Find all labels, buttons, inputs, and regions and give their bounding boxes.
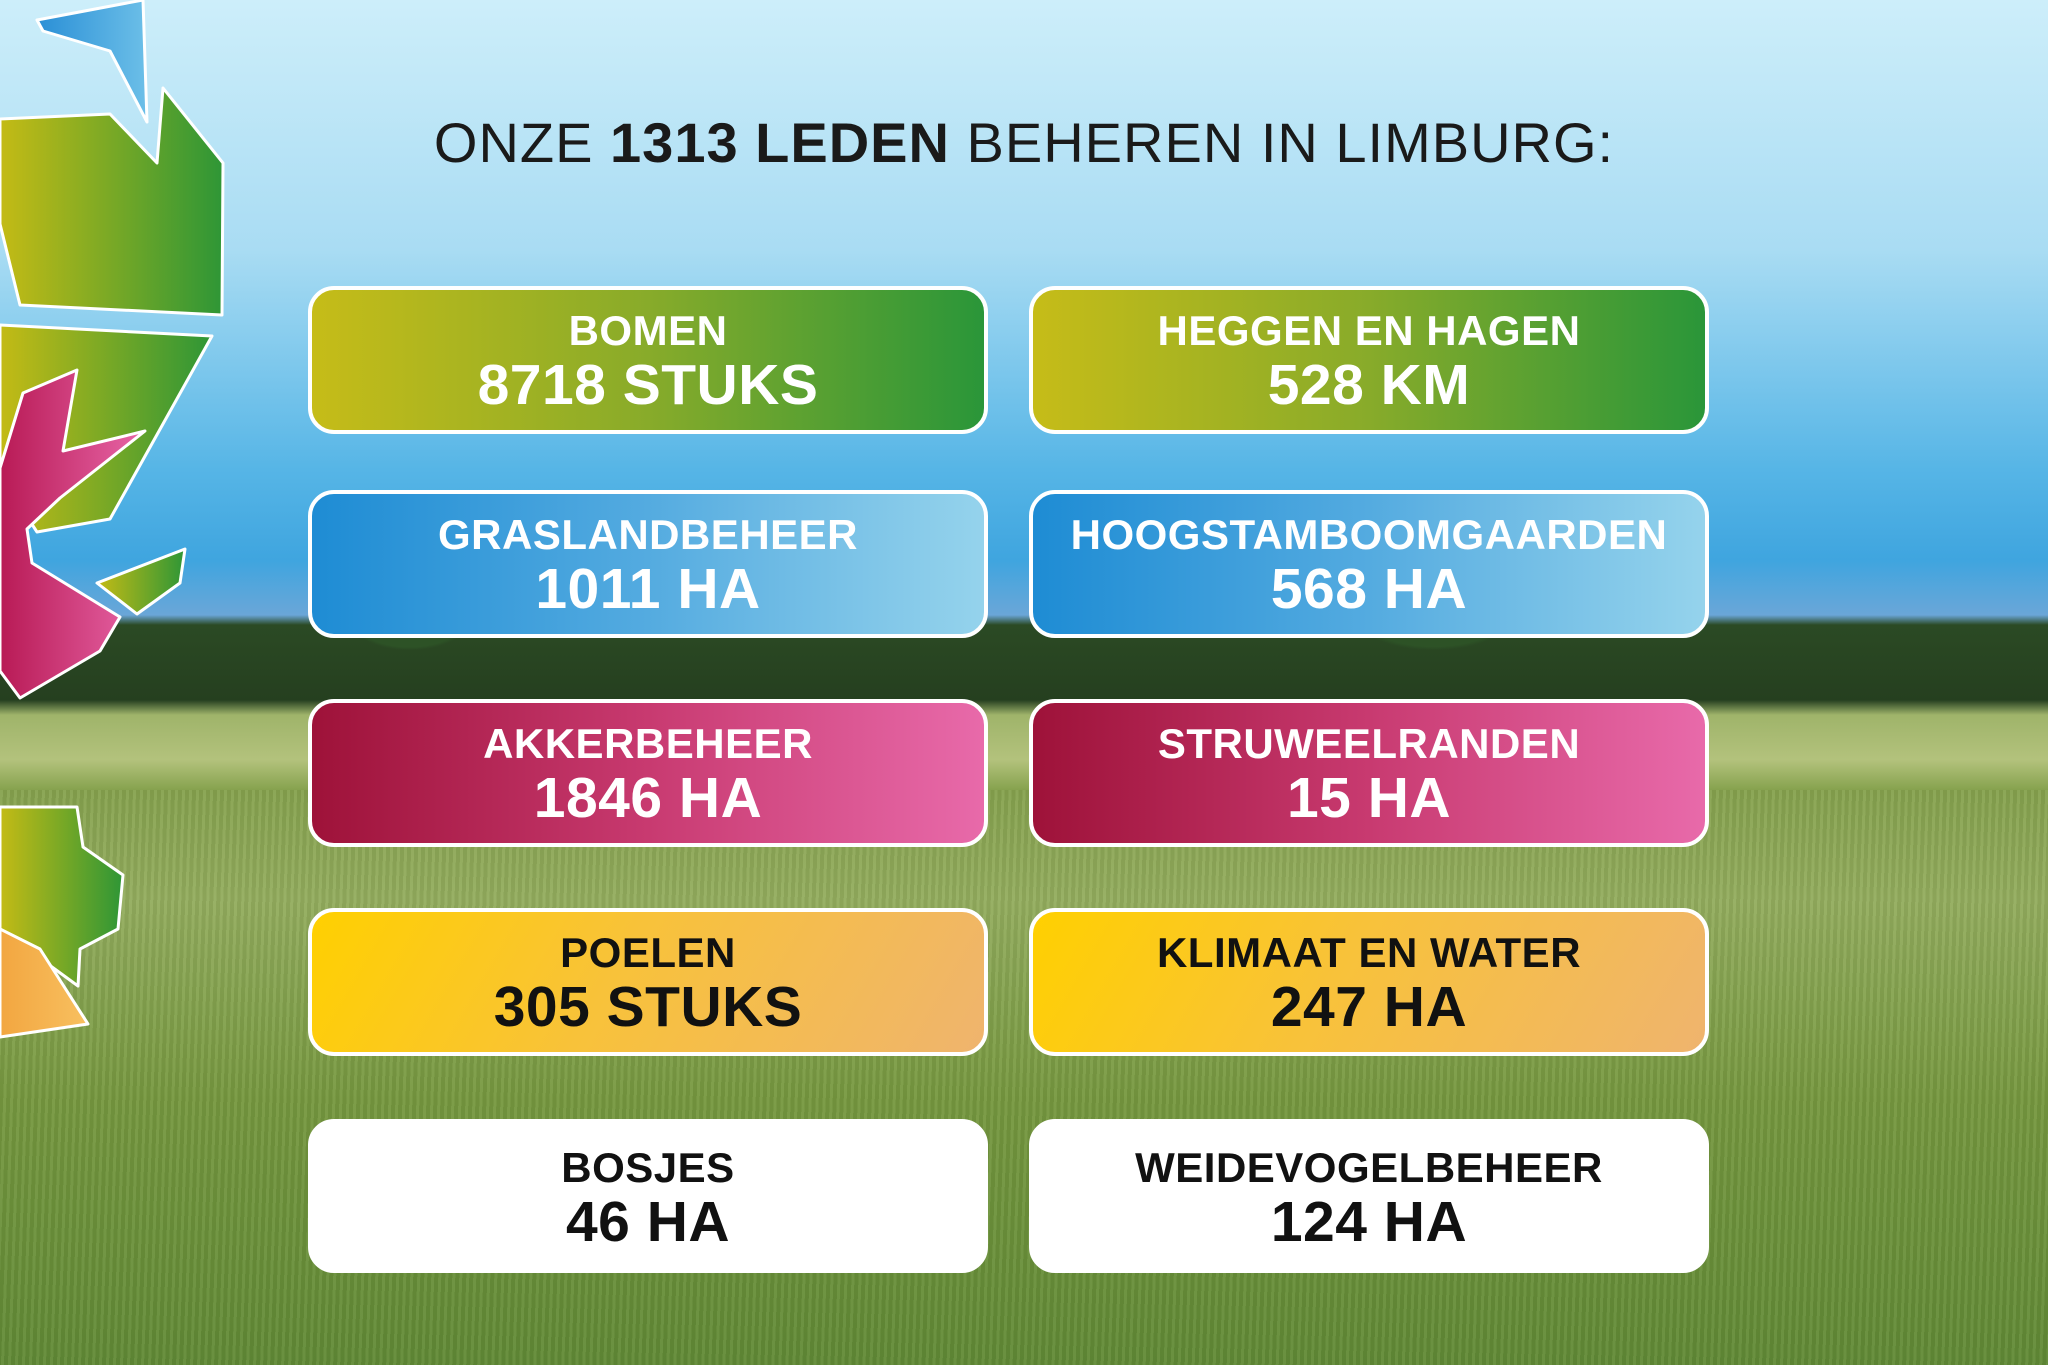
box: weidevogelbeheer xyxy=(1029,1119,1709,1273)
box: akkerbeheer xyxy=(308,699,988,847)
box: bomen: BOMEN xyxy=(569,307,727,354)
box: hoogstamboomgaarden: HOOGSTAMBOOMGAARDEN xyxy=(1071,511,1667,558)
box: weidevogelbeheer: 124 HA xyxy=(1271,1190,1467,1254)
box: bosjes xyxy=(308,1119,988,1273)
box: bomen xyxy=(308,286,988,434)
title: ONZE 1313 LEDEN BEHEREN IN LIMBURG: xyxy=(434,111,1614,174)
box: heggen en hagen: HEGGEN EN HAGEN xyxy=(1158,307,1580,354)
box: graslandbeheer: 1011 HA xyxy=(535,557,761,621)
box: bosjes: BOSJES xyxy=(561,1144,735,1191)
box: graslandbeheer xyxy=(308,490,988,638)
box: struweelranden xyxy=(1029,699,1709,847)
box: akkerbeheer: AKKERBEHEER xyxy=(483,720,813,767)
box: akkerbeheer: 1846 HA xyxy=(534,766,762,830)
logo shapes xyxy=(0,0,224,1038)
box: heggen en hagen: 528 KM xyxy=(1268,353,1470,417)
box: poelen: 305 STUKS xyxy=(494,975,802,1039)
box: klimaat en water: KLIMAAT EN WATER xyxy=(1157,929,1581,976)
box: bosjes: 46 HA xyxy=(566,1190,730,1254)
box: struweelranden: STRUWEELRANDEN xyxy=(1158,720,1580,767)
box: hoogstamboomgaarden xyxy=(1029,490,1709,638)
box: heggen en hagen xyxy=(1029,286,1709,434)
box: struweelranden: 15 HA xyxy=(1287,766,1451,830)
box: poelen: POELEN xyxy=(560,929,736,976)
box: weidevogelbeheer: WEIDEVOGELBEHEER xyxy=(1135,1144,1603,1191)
box: poelen xyxy=(308,908,988,1056)
box: klimaat en water: 247 HA xyxy=(1271,975,1467,1039)
box: hoogstamboomgaarden: 568 HA xyxy=(1271,557,1467,621)
box: bomen: 8718 STUKS xyxy=(478,353,818,417)
box: graslandbeheer: GRASLANDBEHEER xyxy=(438,511,858,558)
box: klimaat en water xyxy=(1029,908,1709,1056)
